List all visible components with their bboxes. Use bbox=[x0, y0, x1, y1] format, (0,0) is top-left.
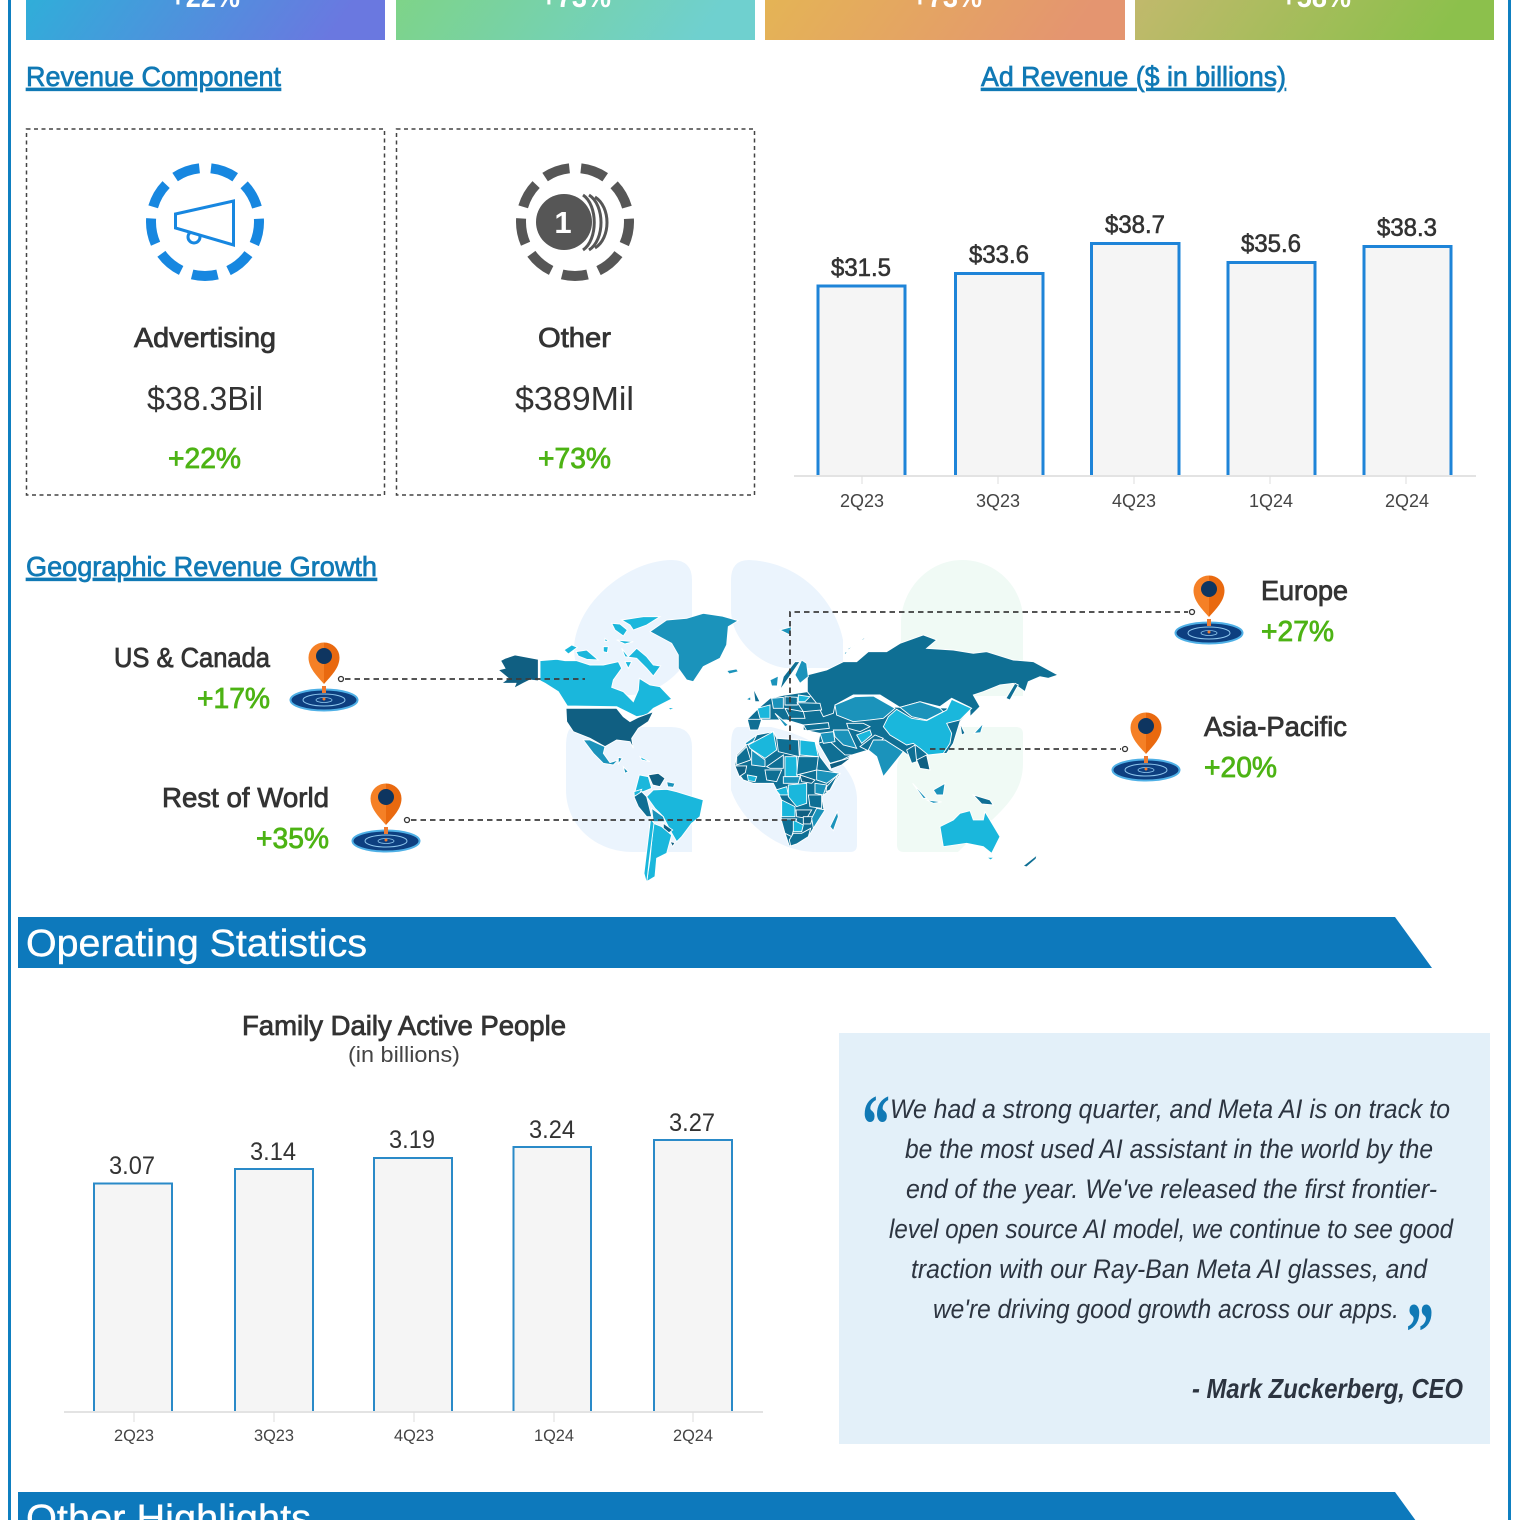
bar chart: family daily active people: Family Daily Active People bbox=[242, 1010, 566, 1041]
section banner: Other Highlights bbox=[18, 1492, 1432, 1520]
metric card: net income growth bbox=[396, 0, 755, 40]
bar chart: family daily active people: 3.24 bbox=[529, 1116, 575, 1144]
callout: Rest of World: Rest of World bbox=[162, 782, 329, 813]
panel: other revenue: +73% bbox=[538, 443, 611, 475]
bar chart: ad revenue: 2Q24 bbox=[1385, 491, 1429, 511]
world map: Americas and Greenland bbox=[498, 613, 738, 883]
landmass: Eurasia bbox=[747, 692, 972, 777]
heading: Revenue Component: Revenue Component bbox=[26, 61, 281, 92]
bar chart: family daily active people: 2Q24 bbox=[673, 1426, 713, 1445]
section banner: Operating Statistics bbox=[18, 917, 1432, 968]
bar chart: family daily active people bbox=[64, 1010, 763, 1445]
callout: Europe: +27% bbox=[1261, 616, 1334, 648]
panel: advertising: Advertising bbox=[134, 322, 276, 353]
callout: Europe bbox=[1176, 575, 1348, 648]
heading: Geographic Revenue Growth: Geographic Revenue Growth bbox=[26, 551, 377, 582]
callout: Asia-Pacific: Asia-Pacific bbox=[1204, 711, 1347, 742]
bar chart: family daily active people: 3.07 bbox=[109, 1152, 155, 1180]
quote panel: we're driving good growth across our apps. bbox=[933, 1294, 1399, 1324]
icon: coin: 1 bbox=[554, 205, 572, 240]
bar chart: ad revenue: $31.5 bbox=[831, 254, 891, 282]
panel: other revenue: $389Mil bbox=[515, 380, 634, 417]
bar chart: ad revenue: $35.6 bbox=[1241, 230, 1301, 258]
bar chart: family daily active people: 4Q23 bbox=[394, 1426, 434, 1445]
bar chart: family daily active people: 3Q23 bbox=[254, 1426, 294, 1445]
metric card: operating income growth bbox=[1135, 0, 1494, 40]
callout: US & Canada: +17% bbox=[197, 683, 270, 715]
bar chart: ad revenue: $38.7 bbox=[1105, 211, 1165, 239]
metric card: revenue growth bbox=[26, 0, 385, 40]
bar chart: ad revenue: 2Q23 bbox=[840, 491, 884, 511]
connector lines bbox=[345, 612, 1188, 820]
quote panel: be the most used AI assistant in the world by the bbox=[905, 1134, 1433, 1164]
callout: US & Canada bbox=[114, 642, 358, 715]
bar chart: family daily active people: 3.14 bbox=[250, 1138, 296, 1166]
section banner: Operating Statistics: Operating Statistics bbox=[26, 923, 367, 965]
bar chart: ad revenue bbox=[794, 211, 1476, 511]
panel: other revenue bbox=[396, 129, 754, 495]
quote panel: end of the year. We've released the first frontier- bbox=[906, 1174, 1437, 1204]
bar chart: ad revenue: $33.6 bbox=[969, 241, 1029, 269]
quote panel: We had a strong quarter, and Meta AI is on track to bbox=[890, 1094, 1450, 1124]
callout: US & Canada: US & Canada bbox=[114, 642, 270, 673]
icon: coin bbox=[521, 168, 629, 276]
quote panel: “ bbox=[862, 1078, 890, 1172]
quote panel: traction with our Ray-Ban Meta AI glasses, and bbox=[911, 1254, 1428, 1284]
metric card: EPS growth bbox=[765, 0, 1125, 40]
bar chart: ad revenue: 3Q23 bbox=[976, 491, 1020, 511]
callout: Asia-Pacific bbox=[1112, 711, 1347, 784]
bar chart: family daily active people: 3.27 bbox=[669, 1109, 715, 1137]
quote panel bbox=[839, 1033, 1490, 1444]
callout: Europe: Europe bbox=[1261, 575, 1348, 606]
icon: megaphone bbox=[151, 168, 259, 276]
bar chart: family daily active people: (in billions) bbox=[348, 1042, 460, 1067]
panel: advertising: +22% bbox=[168, 443, 241, 475]
panel: other revenue: Other bbox=[538, 322, 611, 353]
callout: Rest of World: +35% bbox=[256, 823, 329, 855]
landmass: Africa bbox=[735, 732, 840, 846]
bar chart: ad revenue: 1Q24 bbox=[1249, 491, 1293, 511]
panel: advertising bbox=[26, 129, 384, 495]
bar chart: family daily active people: 1Q24 bbox=[534, 1426, 574, 1445]
callout: Rest of World bbox=[162, 782, 420, 855]
quote panel: ” bbox=[1406, 1286, 1434, 1380]
map backdrop shapes bbox=[566, 560, 1023, 852]
bar chart: family daily active people: 3.19 bbox=[389, 1126, 435, 1154]
bar chart: ad revenue: 4Q23 bbox=[1112, 491, 1156, 511]
quote panel: - Mark Zuckerberg, CEO bbox=[1192, 1373, 1463, 1404]
quote panel: level open source AI model, we continue to see good bbox=[889, 1214, 1454, 1244]
world map: Europe, Asia, Africa, Oceania bbox=[735, 627, 1058, 867]
panel: advertising: $38.3Bil bbox=[147, 380, 263, 417]
callout: Asia-Pacific: +20% bbox=[1204, 752, 1277, 784]
bar chart: ad revenue: $38.3 bbox=[1377, 214, 1437, 242]
heading: Ad Revenue: Ad Revenue ($ in billions) bbox=[981, 61, 1286, 92]
bar chart: family daily active people: 2Q23 bbox=[114, 1426, 154, 1445]
